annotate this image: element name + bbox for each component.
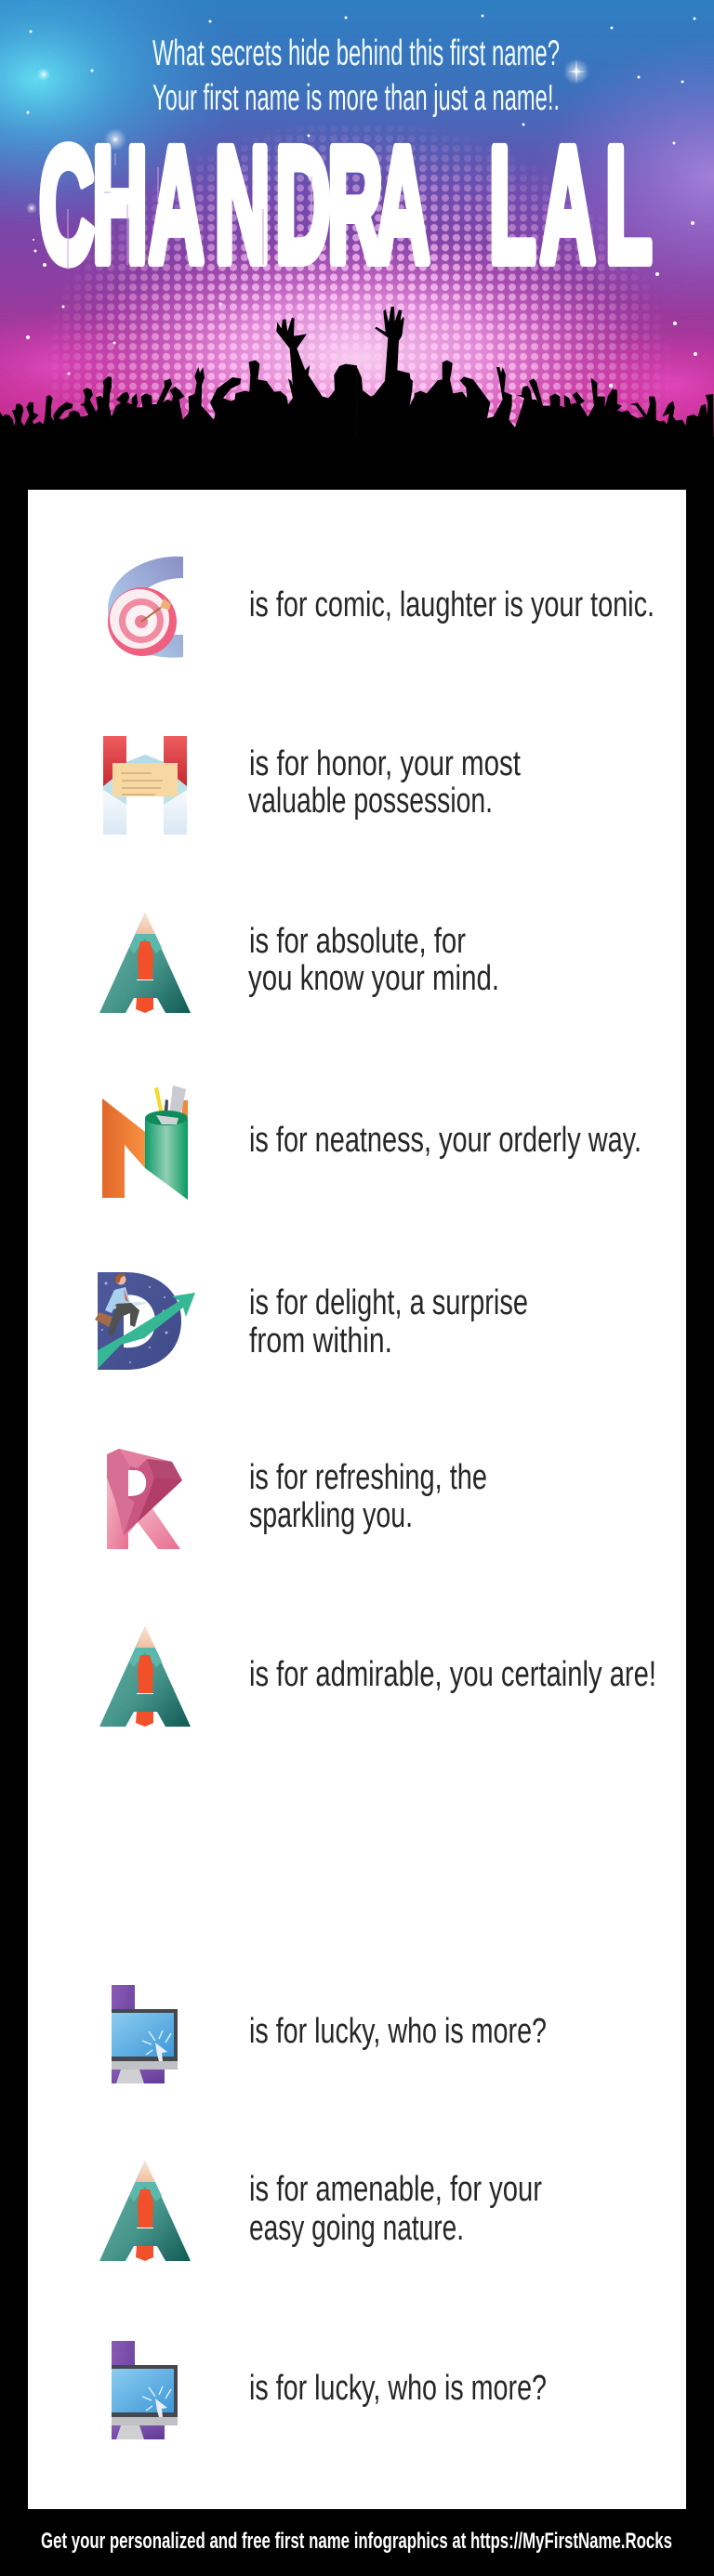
row: C bbox=[108, 557, 654, 658]
text: A (amenable): is for amenable, for your bbox=[249, 2170, 542, 2209]
text: R bbox=[249, 1458, 487, 1535]
text: A (amenable) bbox=[249, 2170, 542, 2248]
row: N bbox=[102, 1085, 641, 1200]
distress marks bbox=[33, 153, 311, 269]
text: A (absolute): is for absolute, for bbox=[249, 922, 466, 961]
text: L (second): is for lucky, who is more? bbox=[249, 2369, 547, 2408]
hero subtitle bbox=[152, 33, 560, 118]
text: A (absolute): you know your mind. bbox=[248, 959, 499, 998]
text: R: sparkling you. bbox=[249, 1496, 413, 1535]
icon: L with monitor bbox=[112, 1985, 178, 2083]
text: H: valuable possession. bbox=[248, 782, 493, 821]
icon: C with target bbox=[108, 557, 183, 658]
panel: hero banner bbox=[0, 0, 714, 437]
row: H bbox=[103, 736, 521, 835]
row: A (admirable) bbox=[99, 1626, 656, 1727]
icon: H with envelope bbox=[103, 736, 187, 835]
text: H bbox=[248, 744, 521, 821]
text: D bbox=[249, 1283, 528, 1360]
panel: white letter list bbox=[28, 490, 686, 2509]
left half of crowd bbox=[0, 318, 357, 455]
right half of crowd bbox=[357, 307, 714, 455]
row: A (absolute) bbox=[99, 913, 499, 1013]
icon: R gemstone bbox=[107, 1449, 182, 1549]
icon: A with tie bbox=[99, 2161, 191, 2261]
text: D: from within. bbox=[249, 1321, 392, 1360]
icon: N with pencil cup bbox=[102, 1085, 188, 1200]
dot matrix light wall bbox=[54, 126, 661, 427]
icon: A with tie bbox=[99, 1626, 191, 1727]
icon: A with tie bbox=[99, 913, 191, 1013]
icon: D with climbing businessman bbox=[95, 1272, 195, 1370]
text: A (amenable): easy going nature. bbox=[249, 2209, 464, 2248]
stars bbox=[26, 15, 697, 388]
hero background gradient bbox=[0, 0, 714, 483]
text: L (first): is for lucky, who is more? bbox=[249, 2012, 547, 2051]
text: A (absolute) bbox=[248, 922, 499, 998]
row: L (first) bbox=[112, 1985, 547, 2083]
text: D: is for delight, a surprise bbox=[249, 1283, 528, 1322]
text: H: is for honor, your most bbox=[249, 744, 521, 783]
icon: L with monitor bbox=[112, 2341, 178, 2439]
row: R bbox=[107, 1449, 487, 1549]
row: L (second) bbox=[112, 2341, 547, 2439]
crowd silhouette bbox=[0, 307, 714, 493]
text: R: is for refreshing, the bbox=[249, 1458, 487, 1497]
row: D bbox=[95, 1272, 528, 1370]
row: A (amenable) bbox=[99, 2161, 542, 2261]
name title: CHANDRA LAL bbox=[39, 115, 652, 296]
